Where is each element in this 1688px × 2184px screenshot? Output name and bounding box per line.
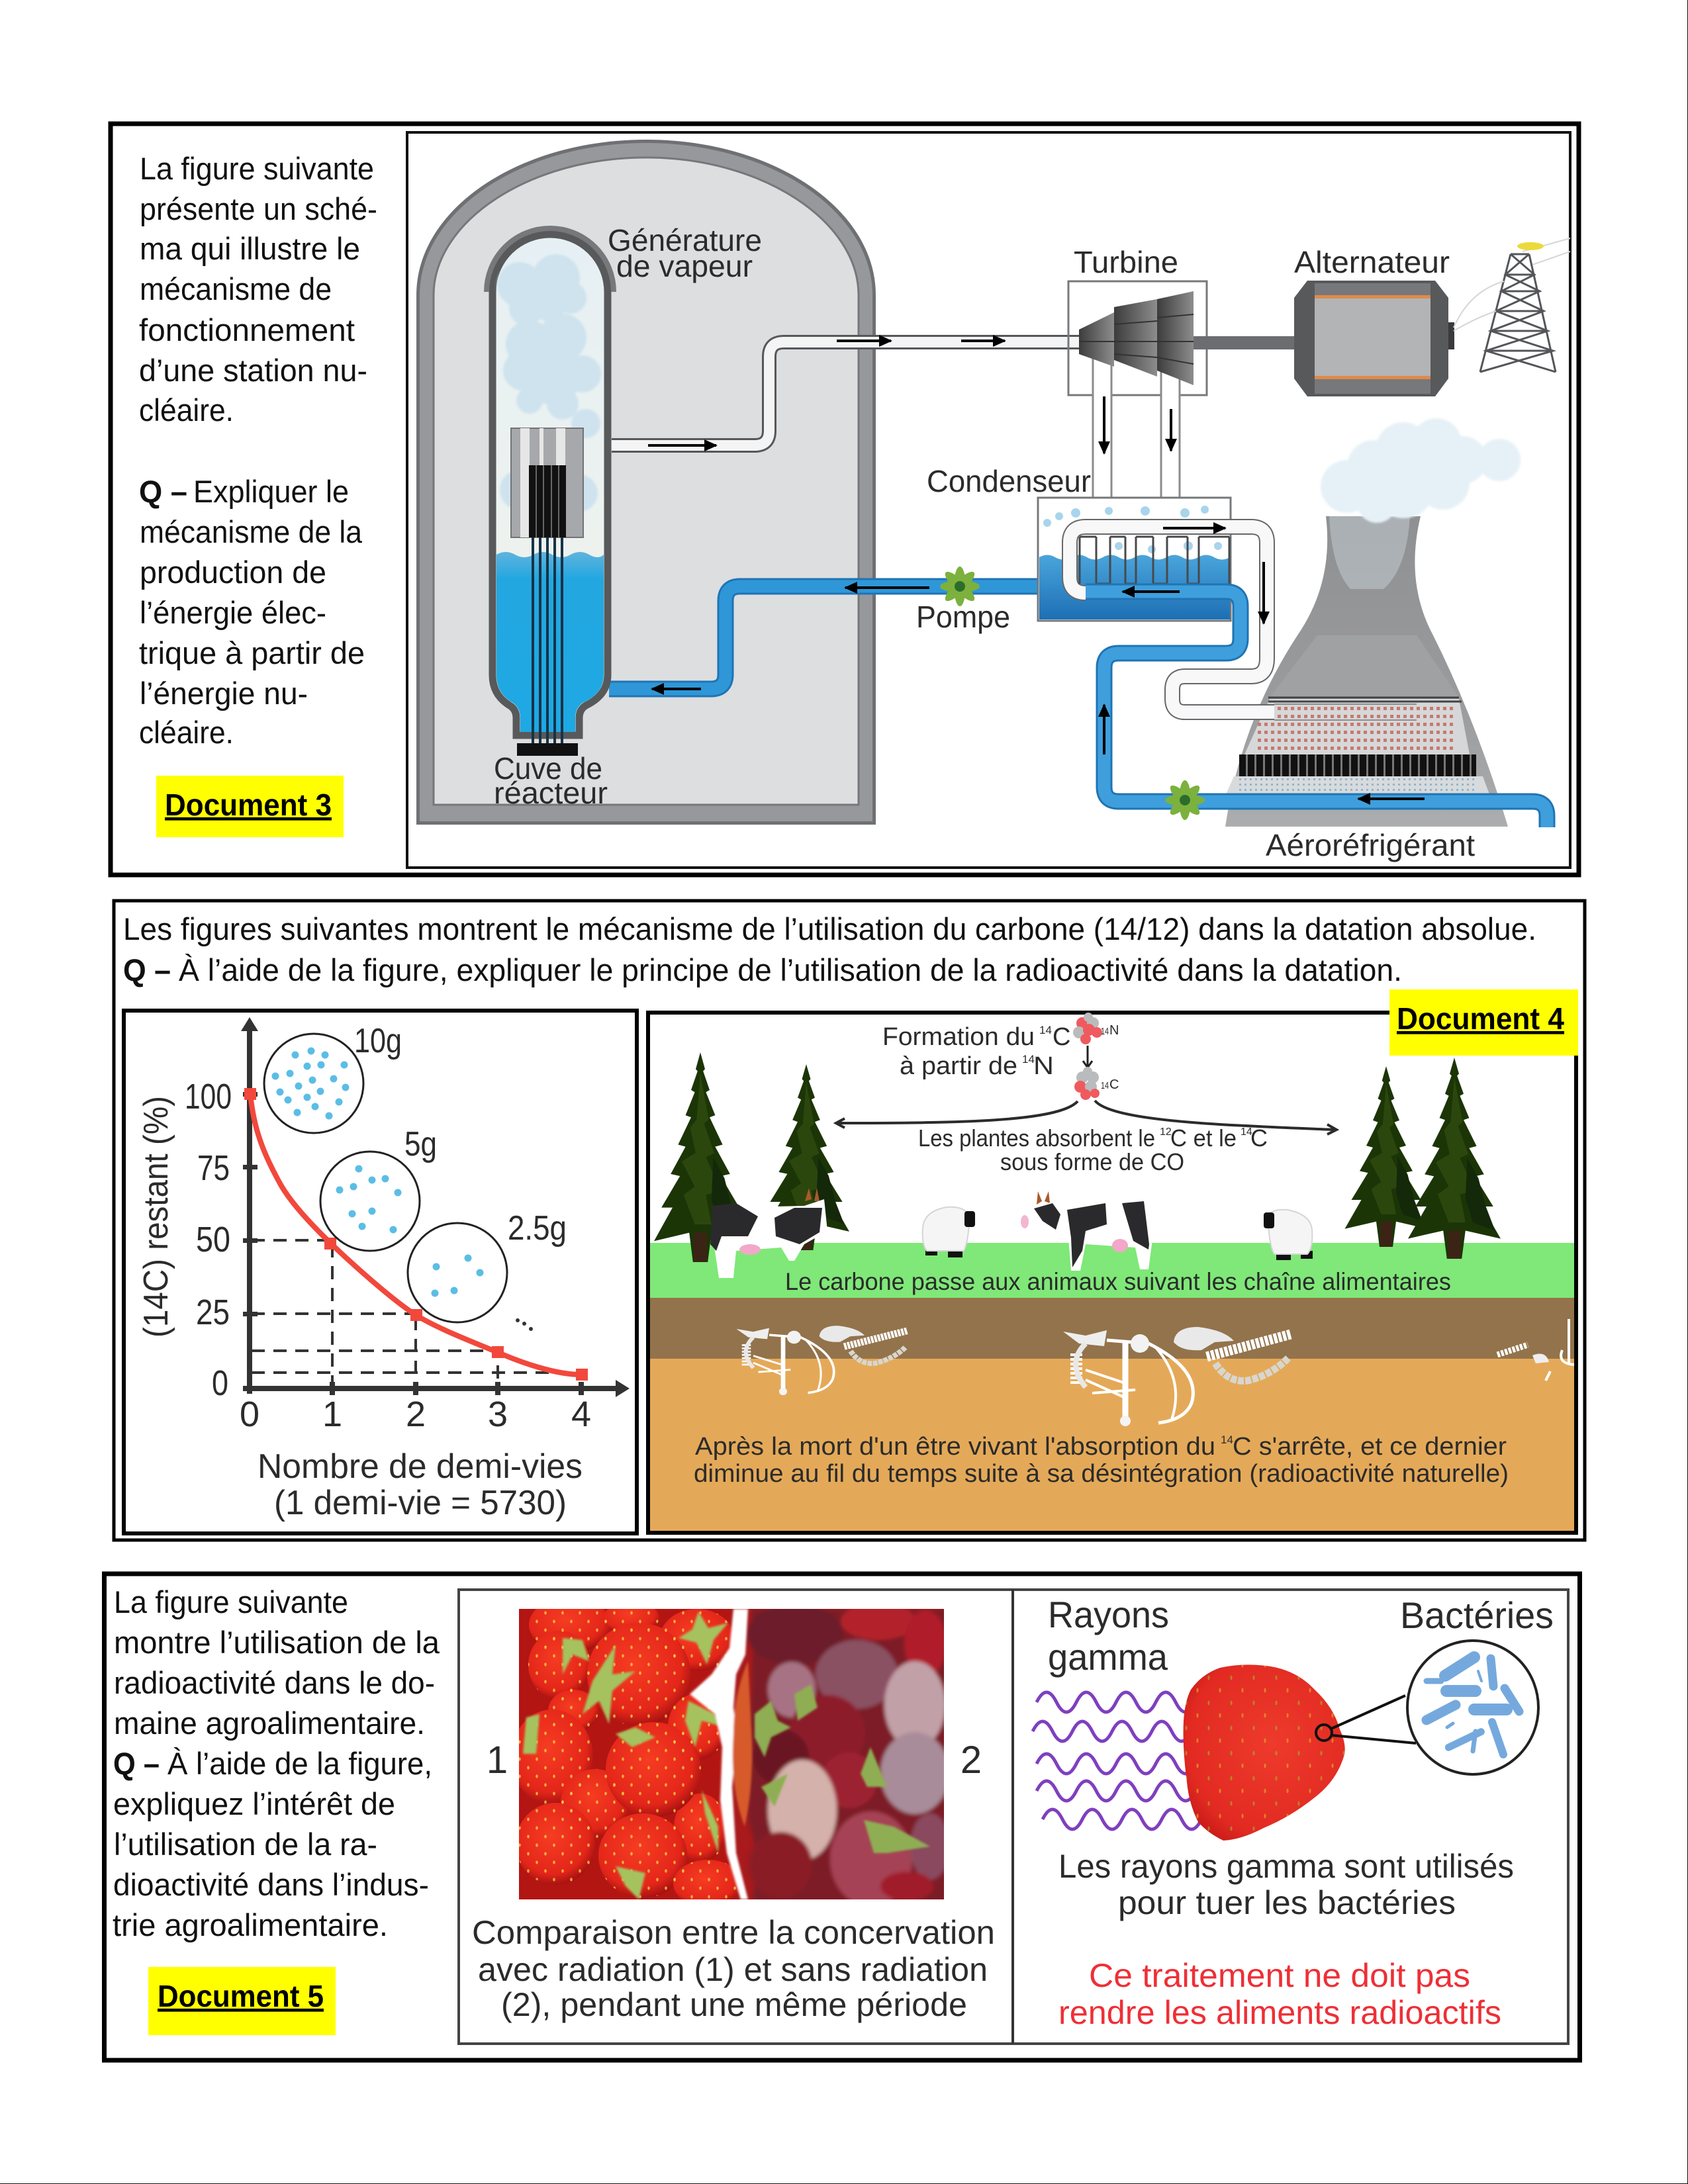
cooling tower — [1225, 516, 1508, 827]
warning text: rendre les aliments radioactifs — [1058, 1994, 1501, 2031]
pipe: cooling water — [1086, 592, 1547, 827]
label: bacteria: Bactéries — [1400, 1594, 1554, 1636]
icon: bacteria circle — [1407, 1641, 1538, 1774]
chart: carbon-14 decay — [124, 1011, 637, 1533]
icon: carbon 14 atom — [1074, 1067, 1100, 1100]
labels: photo numbers: 2 — [961, 1739, 982, 1782]
badge: document 5: Document 5 — [158, 1979, 324, 2013]
steam cloud — [1321, 418, 1521, 523]
labels: photo numbers — [487, 1739, 982, 1782]
chart labels: 0 — [212, 1363, 228, 1403]
text block: document 3 instructions: ma qui illustre le — [140, 231, 360, 266]
icon: cow centre — [1021, 1191, 1152, 1271]
ellipsis dots — [516, 1318, 533, 1331]
arrow: N to C — [1083, 1046, 1092, 1068]
text block: document 3 instructions: l’énergie nu- — [140, 676, 308, 711]
text: formation of carbon 14: 14 — [1039, 1024, 1052, 1036]
spoiled strawberries — [747, 1603, 953, 1907]
pipes to condenser — [1093, 357, 1180, 515]
text: plants absorb carbon: C — [1250, 1124, 1268, 1152]
icon: nitrogen 14 atom — [1073, 1013, 1102, 1044]
panel: food irradiation figures — [459, 1590, 1568, 2044]
text: formation of carbon 14: Formation du — [882, 1023, 1035, 1051]
labels: generator and vessel: de vapeur — [616, 249, 753, 283]
caption: comparison: Comparaison entre la concervation — [472, 1914, 995, 1951]
chart labels: (1 demi-vie = 5730) — [274, 1484, 567, 1522]
reactor building — [416, 140, 876, 825]
water — [496, 552, 604, 732]
icon: cow left — [710, 1188, 827, 1278]
text: formation of carbon 14: N — [1109, 1023, 1119, 1038]
chart labels: (14C) restant (%) — [137, 1096, 175, 1338]
sepals — [523, 1612, 728, 1899]
warning text — [1058, 1957, 1501, 2031]
chart labels: 100 — [185, 1077, 232, 1116]
axes — [241, 1017, 630, 1397]
text block: document 3 instructions: présente un sché- — [140, 191, 377, 226]
labels: condenser, pump, cooling tower — [916, 464, 1475, 862]
chart labels — [137, 1022, 591, 1522]
icon: electricity pylon — [1454, 238, 1570, 372]
text: formation of carbon 14: 14 — [1022, 1053, 1035, 1066]
panel: document 3 — [111, 124, 1579, 875]
text: formation of carbon 14: 14 — [1101, 1026, 1109, 1037]
text block: document 3 instructions — [139, 151, 377, 750]
icon: sheep left — [923, 1207, 975, 1257]
heading: document 4 instructions — [123, 911, 1536, 987]
icon: skeleton left — [736, 1326, 907, 1395]
fuel assembly — [511, 428, 583, 743]
icon: skeleton right — [1497, 1319, 1574, 1381]
label: turbine: Turbine — [1074, 245, 1178, 279]
text block: document 3 instructions: cléaire. — [139, 392, 234, 428]
icon: strawberry — [1184, 1664, 1345, 1841]
text block: document 5 instructions: La figure suivante — [114, 1584, 348, 1619]
labels: photo numbers: 1 — [487, 1739, 508, 1782]
text: decay after death: 14 — [1221, 1433, 1233, 1446]
text block: document 3 instructions: d’une station nu- — [139, 353, 367, 388]
labels: condenser, pump, cooling tower: Pompe — [916, 600, 1010, 634]
text: decay after death: diminue au fil du temps suite à sa désintégration (radioactivité naturelle) — [694, 1460, 1509, 1488]
flow arrows — [648, 341, 1425, 799]
chart labels: 0 — [240, 1394, 259, 1434]
chart labels: Nombre de demi-vies — [258, 1447, 583, 1486]
text: formation of carbon 14 — [882, 1023, 1119, 1092]
text block: document 5 instructions: maine agroalimentaire. — [114, 1706, 425, 1741]
photo: strawberries with and without radiation — [519, 1609, 944, 1899]
dashed guides — [252, 1240, 569, 1388]
ground layers — [650, 1243, 1574, 1531]
icon: sheep right — [1264, 1210, 1313, 1260]
text block: document 5 instructions: À l’aide de la figure, — [167, 1746, 432, 1781]
heading: document 4 instructions: Les figures suivantes montrent le mécanisme de l’utilisation du carbone (14/12) dans la datation absolue. — [123, 911, 1536, 946]
text: decay after death — [694, 1433, 1509, 1488]
chart labels: 2 — [406, 1394, 426, 1434]
alternator — [1294, 281, 1454, 396]
decay curve — [244, 1088, 588, 1381]
text block: document 5 instructions: trie agroalimentaire. — [113, 1907, 388, 1942]
labels: condenser, pump, cooling tower: Condenseur — [927, 464, 1091, 498]
text block: document 3 instructions: cléaire. — [139, 715, 234, 750]
chart labels: 50 — [196, 1220, 230, 1259]
chart labels: 3 — [488, 1394, 508, 1434]
caption: comparison: avec radiation (1) et sans radiation — [478, 1951, 988, 1988]
icon: feed pump — [940, 567, 980, 606]
text block: document 3 instructions: La figure suivante — [140, 151, 374, 186]
text: plants absorb carbon: 14 — [1241, 1126, 1252, 1138]
badge: document 4 — [1389, 989, 1578, 1056]
text: food chain: Le carbone passe aux animaux suivant les chaîne alimentaires — [785, 1268, 1451, 1295]
badge: document 3: Document 3 — [165, 788, 332, 822]
reactor vessel — [487, 228, 614, 756]
chart labels: 5g — [404, 1125, 437, 1163]
chart labels: 10g — [354, 1022, 402, 1060]
caption: comparison — [472, 1914, 995, 2023]
text: gamma rays kill bacteria: pour tuer les bactéries — [1118, 1884, 1456, 1921]
panel: document 5 — [105, 1574, 1579, 2060]
text block: document 3 instructions: Q – — [139, 474, 187, 509]
chart labels: 1 — [322, 1394, 342, 1434]
turbine — [1068, 281, 1296, 515]
text: plants absorb carbon: C et le — [1170, 1124, 1237, 1152]
text block: document 3 instructions: mécanisme de — [140, 271, 332, 306]
text block: document 5 instructions: l’utilisation de la ra- — [114, 1827, 377, 1862]
labels: condenser, pump, cooling tower: Aéroréfrigérant — [1266, 828, 1475, 862]
text: formation of carbon 14: à partir de — [900, 1052, 1017, 1080]
labels: generator and vessel: Générature — [608, 223, 762, 257]
badge: document 4: Document 4 — [1397, 1001, 1564, 1036]
magnifier lines — [1316, 1696, 1416, 1743]
irradiated strawberries — [519, 1609, 739, 1899]
label: gamma rays — [1048, 1594, 1169, 1678]
text: decay after death: C s'arrête, et ce dernier — [1233, 1433, 1507, 1461]
text: plants absorb carbon: sous forme de CO — [1000, 1148, 1184, 1175]
pipe: steam line — [612, 342, 1086, 445]
text: plants absorb carbon: Les plantes absorbent le — [918, 1124, 1155, 1152]
text: gamma rays kill bacteria: Les rayons gamma sont utilisés — [1058, 1848, 1514, 1885]
panel: nuclear plant diagram — [407, 132, 1570, 868]
cooling coil — [1070, 527, 1417, 720]
labels: generator and vessel — [494, 223, 762, 810]
text block: document 3 instructions: fonctionnement — [139, 312, 355, 347]
heading: document 4 instructions: Q – — [123, 952, 171, 987]
arrows: carbon absorption — [836, 1101, 1336, 1134]
chart labels: 4 — [571, 1394, 591, 1434]
panel: document 4 — [114, 901, 1585, 1540]
panel: carbon cycle landscape — [648, 1013, 1576, 1533]
steam clouds — [497, 254, 601, 512]
text block: document 3 instructions: production de — [140, 555, 326, 590]
text: gamma rays kill bacteria — [1058, 1848, 1514, 1921]
text: formation of carbon 14: 14 — [1101, 1080, 1109, 1091]
caption: comparison: (2), pendant une même période — [501, 1986, 967, 2023]
text block: document 3 instructions: mécanisme de la — [140, 514, 363, 549]
labels: generator and vessel: réacteur — [494, 776, 608, 810]
text: plants absorb carbon: 12 — [1160, 1126, 1172, 1138]
sample 10g — [264, 1034, 363, 1133]
label: alternator: Alternateur — [1294, 245, 1450, 279]
heading: document 4 instructions: À l’aide de la figure, expliquer le principe de l’utilisation de la radioactivité dans la datation. — [179, 952, 1402, 987]
chart labels: 75 — [197, 1148, 230, 1188]
badge: document 5 — [148, 1967, 336, 2035]
sample 5g — [320, 1152, 420, 1251]
text: formation of carbon 14: N — [1033, 1052, 1054, 1080]
text: decay after death: Après la mort d'un être vivant l'absorption du — [695, 1433, 1215, 1461]
text block: document 5 instructions: montre l’utilisation de la — [114, 1625, 440, 1660]
pipe: feedwater line — [609, 586, 1039, 689]
text block: document 5 instructions: dioactivité dans l’indus- — [113, 1867, 429, 1902]
icon: skeleton centre — [1063, 1327, 1291, 1426]
label: gamma rays: Rayons — [1048, 1594, 1169, 1635]
text block: document 5 instructions: expliquez l’intérêt de — [113, 1786, 395, 1821]
chart labels: 25 — [196, 1293, 230, 1332]
text: plants absorb carbon — [918, 1124, 1268, 1175]
text block: document 5 instructions: Q – — [113, 1746, 160, 1781]
white gap and juice — [690, 1609, 752, 1899]
text block: document 3 instructions: Expliquer le — [193, 474, 349, 509]
warning text: Ce traitement ne doit pas — [1089, 1957, 1470, 1994]
labels: generator and vessel: Cuve de — [494, 751, 602, 786]
label: gamma rays: gamma — [1048, 1636, 1168, 1678]
sample 2.5g — [408, 1223, 507, 1322]
text: formation of carbon 14: C — [1109, 1077, 1119, 1092]
text block: document 3 instructions: trique à partir de — [139, 635, 365, 670]
text block: document 3 instructions: l’énergie élec- — [140, 595, 326, 630]
condenser — [1038, 498, 1417, 720]
chart labels: 2.5g — [508, 1209, 567, 1248]
icon: cooling pump — [1165, 780, 1205, 820]
badge: document 3 — [156, 776, 344, 837]
droplets — [1043, 506, 1222, 553]
text: formation of carbon 14: C — [1053, 1023, 1070, 1051]
text block: document 5 instructions — [113, 1584, 440, 1942]
gamma waves — [1033, 1692, 1201, 1829]
text block: document 5 instructions: radioactivité dans le do- — [114, 1665, 435, 1700]
trees — [654, 1052, 1501, 1262]
